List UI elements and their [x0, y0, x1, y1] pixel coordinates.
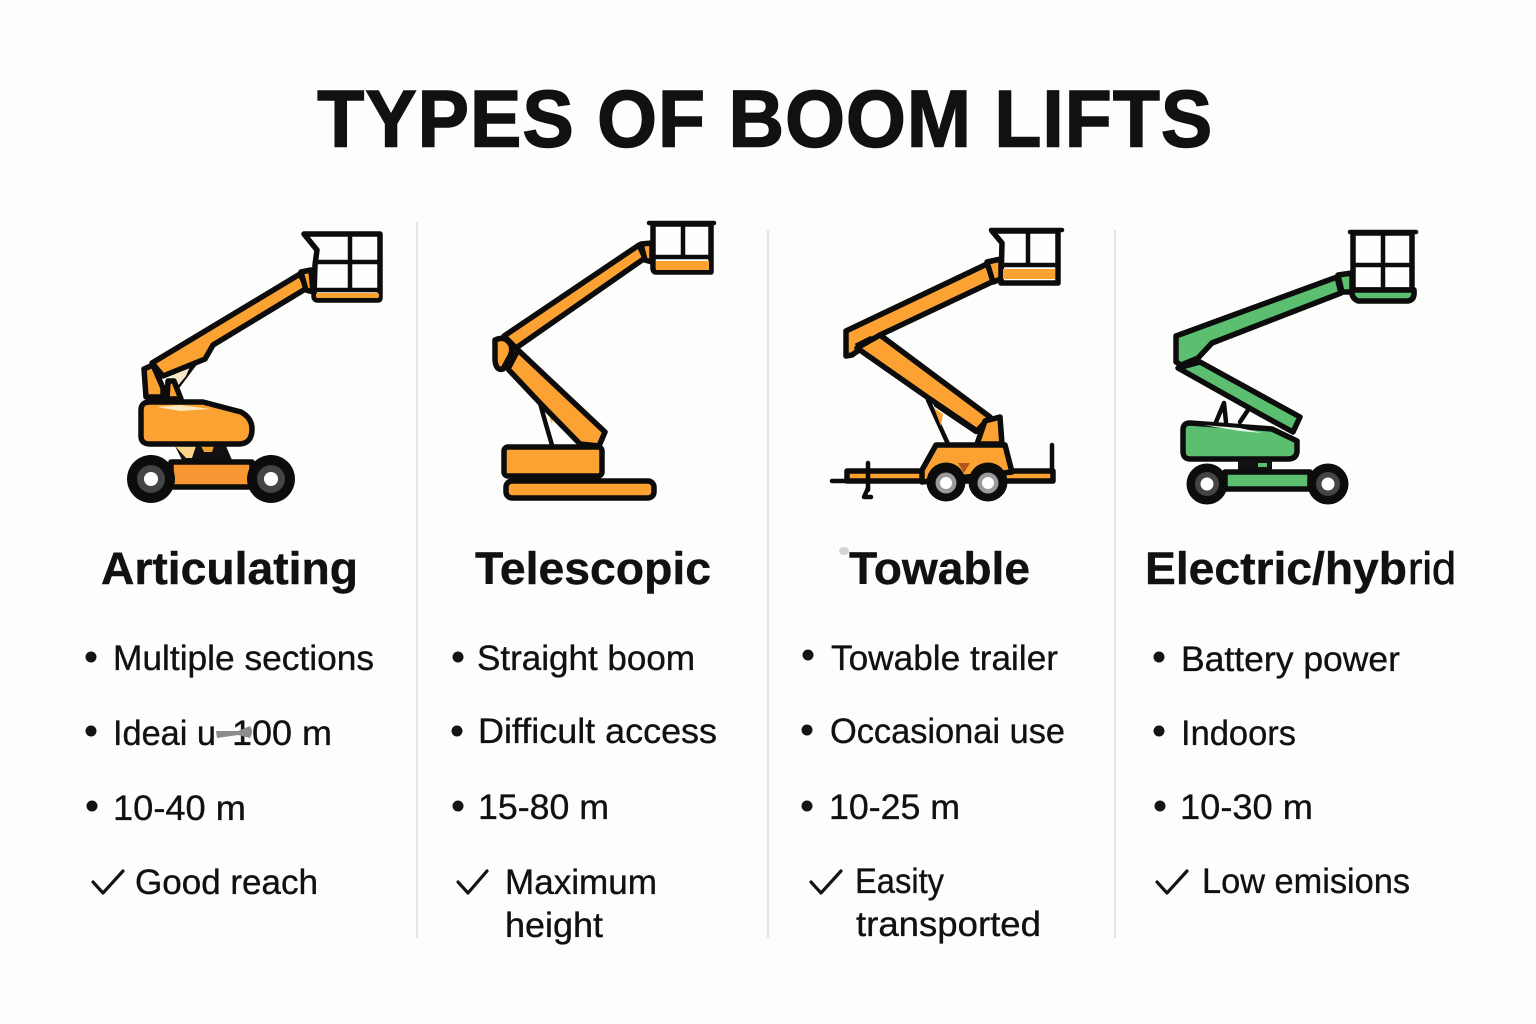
heading: Articulating: Articulating: [101, 543, 358, 594]
icon: articulating boom lift: [127, 234, 380, 503]
list item: Easily transported: Easity: [855, 862, 944, 901]
list item: Occasional use: Occasionai use: [830, 712, 1065, 751]
list item: Straight boom: Straight boom: [477, 639, 695, 678]
icon: electric boom lift: [1176, 232, 1416, 504]
list item: Maximum height: height: [505, 906, 603, 945]
list item: Easily transported: [811, 862, 1041, 944]
panel: electric/hybrid: [1145, 232, 1456, 901]
panel: towable: [802, 230, 1065, 944]
list item: Towable trailer: Towable trailer: [831, 639, 1058, 678]
heading: Electric/hybrid: rid: [1408, 543, 1456, 594]
list item: Ideal up to 100 m: Ideai u: [113, 714, 216, 753]
list item: Indoors: Indoors: [1181, 714, 1296, 753]
list item: Ideal up to 100 m: 100 m: [232, 714, 332, 753]
list item: 10-25 m: 10-25 m: [829, 788, 960, 827]
list item: 10-30 m: 10-30 m: [1180, 788, 1313, 827]
list item: Easily transported: transported: [856, 905, 1041, 944]
list item: Low emissions: Low emisions: [1202, 862, 1410, 901]
list item: Maximum height: Maximum: [505, 863, 657, 902]
list item: Multiple sections: Multiple sections: [113, 639, 374, 678]
list item: 10-40 m: 10-40 m: [113, 789, 246, 828]
list item: Ideal up to 100 m: [86, 714, 332, 753]
heading: Telescopic: Telescopic: [475, 543, 711, 594]
list item: 15-80 m: 15-80 m: [478, 788, 609, 827]
title: TYPES OF BOOM LIFTS: [317, 73, 1212, 164]
heading: Electric/hybrid: Electric/hyb: [1145, 543, 1407, 594]
icon: telescopic boom lift: [495, 223, 714, 498]
list item: Maximum height: [458, 863, 657, 945]
list item: Good reach: Good reach: [135, 863, 318, 902]
list item: Battery power: Battery power: [1181, 640, 1400, 679]
list item: Difficult access: Difficult access: [478, 712, 717, 751]
icon: towable boom lift: [832, 230, 1062, 502]
heading: Towable with stray mark: Towable: [849, 543, 1030, 594]
panel: articulating: [86, 234, 380, 902]
panel: telescopic: [452, 223, 717, 945]
